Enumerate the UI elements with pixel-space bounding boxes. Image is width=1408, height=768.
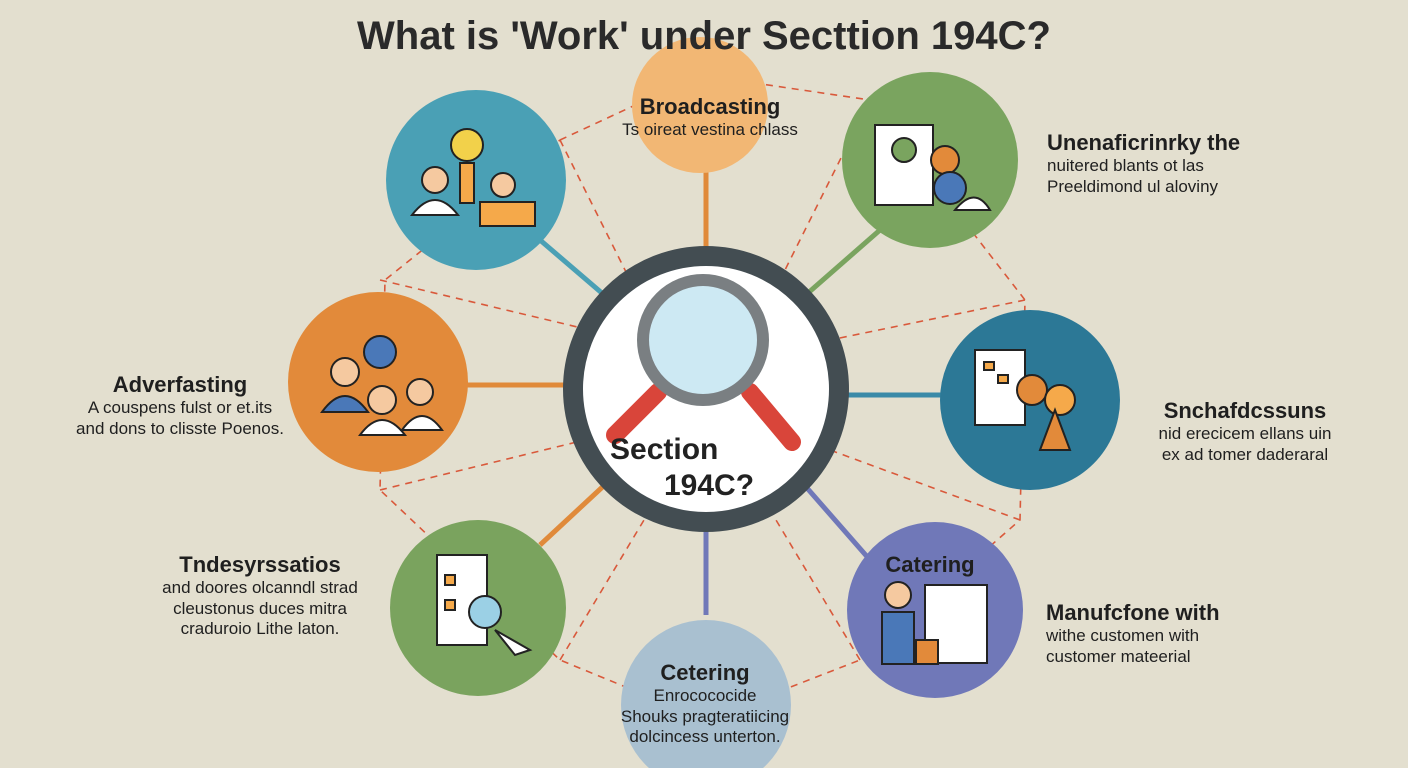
text: broadcasting [622,94,798,139]
text: adverfasting: Adverfasting [113,372,247,397]
teal: people + bulb [451,129,483,161]
text: broadcasting: Broadcasting [640,94,780,119]
text: catering: Catering [885,552,975,577]
text: adverfasting: A couspens fulst or et.its [88,398,272,417]
text: cetering: dolcincess unterton. [629,727,781,746]
satellite circles [632,37,768,173]
dashed connections [380,75,1025,720]
text: top right: Unenaficrinrky the [1047,130,1240,155]
text: bottom right: withe customen with [1046,626,1199,645]
text: bottom left: and doores olcanndl strad [162,578,358,597]
text: adverfasting: and dons to clisste Poenos. [76,419,284,438]
text: cetering: Cetering [660,660,750,685]
blue: chart + gears [975,350,1025,425]
center ring [573,256,839,522]
text: top right: Preeldimond ul aloviny [1047,177,1218,196]
text: bottom right: Manufcfone with [1046,600,1220,625]
green bottom: doc + magnifier [437,555,487,645]
text: cetering: Shouks pragteratiicing [621,707,789,726]
text: right: ex ad tomer daderaral [1162,445,1328,464]
center label: 194C? [664,469,754,502]
text: bottom left: cleustonus duces mitra [173,599,347,618]
center label [610,433,754,502]
text: cetering: Enrocococide [653,686,756,705]
center label: Section [610,433,718,466]
text: bottom left: Tndesyrssatios [179,552,341,577]
text: right: Snchafdcssuns [1164,398,1326,423]
connector lines [465,170,945,615]
icons simplified [322,125,1075,664]
text: bottom left [162,552,358,638]
text: right [1159,398,1331,464]
text: bottom left: craduroio Lithe laton. [181,619,339,638]
text: bottom right [1046,600,1220,666]
magnifier [615,280,792,442]
text: bottom right: customer mateerial [1046,647,1191,666]
orange: people + gear [364,336,396,368]
text: top right [1047,130,1240,196]
text: cetering [621,660,789,746]
green top right: doc + gears [875,125,933,205]
text: broadcasting: Ts oireat vestina chlass [622,120,798,139]
title: What is 'Work' under Secttion 194C? [357,14,1051,58]
text: adverfasting [76,372,284,438]
text: top right: nuitered blants ot las [1047,156,1204,175]
text: right: nid erecicem ellans uin [1159,424,1331,443]
purple: person + screen [925,585,987,663]
